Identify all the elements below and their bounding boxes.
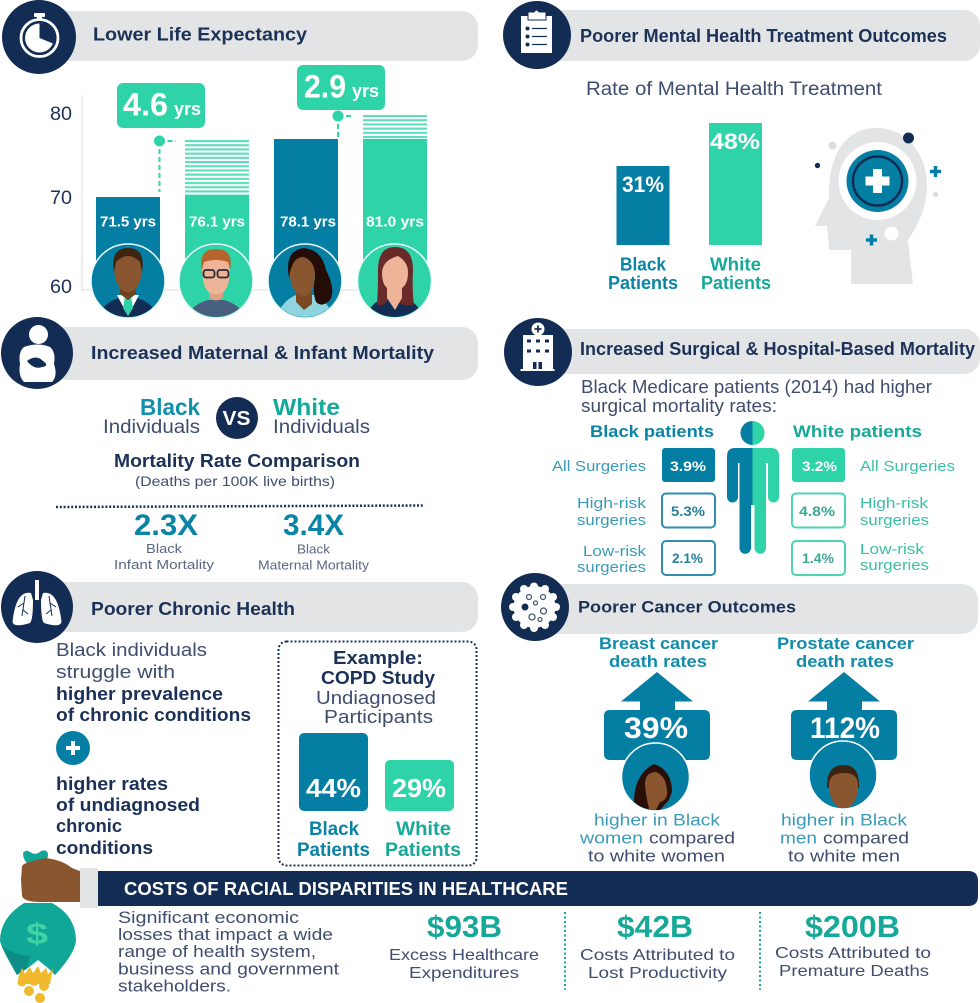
icon: white man portrait (179, 244, 253, 320)
text: economic losses: range of health system, (118, 943, 316, 961)
chart: life expectancy bars: 60 (50, 277, 72, 298)
icon: lungs (1, 571, 73, 643)
stat: maternal mortality: 3.4X (283, 509, 344, 542)
panel: chronic health (1, 571, 478, 866)
chart: treatment bars: Patients (608, 273, 678, 293)
chart: life expectancy bars: 71.5 yrs (100, 214, 156, 230)
icon: hospital (504, 318, 572, 386)
chart: life expectancy bars (50, 95, 430, 298)
icon: cancer cell (501, 573, 569, 641)
callout: COPD study example: Black (309, 819, 359, 840)
stat: prostate cancer (777, 635, 915, 866)
text: medicare patients (581, 377, 932, 416)
subheading: rate of treatment: Rate of Mental Health Treatment (586, 79, 883, 100)
text: economic losses: stakeholders. (118, 978, 231, 996)
text: undiagnosed: conditions (56, 838, 153, 858)
stat: prostate cancer: death rates (796, 653, 894, 671)
column: black patients: surgeries (577, 559, 646, 576)
stat: breast cancer: death rates (609, 653, 707, 671)
stat: $200B: Costs Attributed to (775, 945, 931, 962)
text: medicare patients: surgical mortality rates: (581, 396, 777, 416)
column: black patients: surgeries (577, 512, 646, 529)
comparison: black vs white: VS (222, 408, 250, 430)
column: white patients: High-risk (860, 495, 929, 512)
callout: COPD study example: Undiagnosed (316, 688, 436, 708)
panel: lower life expectancy (2, 0, 478, 320)
stat: $200B (775, 909, 931, 980)
header pill: mental health (540, 10, 980, 61)
chart: life expectancy bars: 81.0 yrs (366, 214, 424, 230)
text: higher prevalence (56, 640, 251, 725)
text: economic losses (118, 909, 339, 996)
column: white patients: 3.2% (802, 458, 838, 474)
column: black patients: 5.3% (671, 503, 706, 519)
icon: black man portrait (91, 244, 165, 320)
heading: maternal: Increased Maternal & Infant Mortality (91, 343, 434, 363)
stat: prostate cancer: to white men (788, 846, 900, 866)
text: higher prevalence: Black individuals (56, 640, 207, 660)
comparison: black vs white: Black (140, 394, 200, 420)
callout: COPD study example: White (396, 819, 451, 840)
stat: prostate cancer: 112% (810, 712, 880, 745)
stat: $93B (389, 909, 539, 982)
column: white patients: 1.4% (802, 550, 835, 566)
stat: breast cancer: compared (649, 828, 735, 848)
chart: treatment bars: 48% (710, 129, 760, 154)
stat: infant mortality (114, 509, 215, 572)
stat: prostate cancer: men (780, 828, 817, 848)
stat: breast cancer: to white women (588, 846, 725, 866)
stat: $93B: Excess Healthcare (389, 947, 539, 964)
stat: $200B: Premature Deaths (779, 963, 929, 980)
stat: $93B: $93B (427, 909, 502, 944)
banner: costs heading (98, 871, 978, 906)
icon: split person (727, 421, 779, 554)
stat: breast cancer: Breast cancer (599, 635, 719, 653)
column: black patients: 2.1% (672, 550, 704, 566)
heading: lower life expectancy: Lower Life Expectancy (93, 24, 307, 44)
column: black patients: Black patients (590, 422, 714, 441)
callout: 2.9 yrs gap: 2.9 (304, 68, 346, 104)
chart: life expectancy bars: 78.1 yrs (280, 214, 336, 230)
column: white patients (792, 422, 955, 575)
text: higher prevalence: higher prevalence (56, 684, 223, 704)
stat: prostate cancer: higher in Black (781, 810, 908, 830)
text: mortality rate comparison: Mortality Rate Comparison (114, 451, 360, 471)
column: white patients: 4.8% (799, 503, 836, 519)
chart: treatment bars: Black (620, 254, 667, 274)
callout: 2.9 yrs gap: yrs (352, 81, 379, 101)
icon: hand holding money bag (0, 850, 98, 1003)
stat: maternal mortality: Maternal Mortality (258, 558, 370, 572)
heading: surgical: Increased Surgical & Hospital-Based Mortality (580, 339, 975, 359)
chart: treatment bars: Patients (701, 273, 771, 293)
chart: treatment bars: 31% (622, 172, 664, 197)
callout: COPD study example: Example: (333, 648, 423, 668)
text: economic losses: business and government (118, 960, 339, 978)
stat: breast cancer (579, 635, 735, 866)
stat: maternal mortality (258, 509, 370, 572)
comparison: black vs white (103, 394, 370, 439)
header pill: life expectancy (50, 11, 478, 61)
banner: costs heading: COSTS OF RACIAL DISPARITIES IN HEALTHCARE (124, 878, 568, 899)
column: black patients (552, 422, 715, 576)
panel: maternal and infant mortality (1, 317, 478, 572)
icon: head with medical cross (815, 128, 941, 284)
heading: mental health: Poorer Mental Health Treatment Outcomes (580, 26, 947, 46)
callout: COPD study example: 29% (392, 773, 446, 803)
callout: COPD study example: Participants (324, 707, 433, 727)
column: white patients: surgeries (860, 557, 929, 574)
callout: 2.9 yrs gap (297, 65, 385, 138)
header pill: chronic (50, 582, 478, 632)
stat: $42B: Costs Attributed to (580, 947, 735, 964)
stat: infant mortality: Black (146, 541, 183, 556)
text: mortality rate comparison: (Deaths per 100K live births) (135, 473, 335, 489)
stat: maternal mortality: Black (297, 542, 331, 556)
callout: 4.6 yrs gap (117, 83, 205, 192)
header pill: surgical (540, 329, 980, 374)
stat: $93B: Expenditures (409, 965, 519, 982)
stat: prostate cancer: compared (823, 828, 909, 848)
text: higher prevalence: of chronic conditions (56, 705, 251, 725)
column: black patients: 3.9% (670, 458, 707, 474)
panel: costs of racial disparities (0, 850, 978, 1003)
chart: life expectancy bars: 76.1 yrs (189, 214, 245, 230)
panel: mental health treatment (503, 1, 980, 293)
icon: black woman portrait (268, 244, 342, 320)
callout: COPD study example: 44% (306, 773, 361, 803)
icon: stopwatch (2, 0, 76, 74)
stat: $42B (580, 909, 735, 982)
text: undiagnosed: chronic (56, 816, 122, 836)
header pill: maternal (50, 327, 478, 380)
stat: infant mortality: 2.3X (134, 509, 198, 542)
stat: prostate cancer: Prostate cancer (777, 635, 915, 653)
text: medicare patients: Black Medicare patients (2014) had higher (581, 377, 932, 397)
text: economic losses: losses that impact a wide (118, 926, 333, 944)
callout: COPD study example: Patients (297, 840, 370, 861)
column: black patients: All Surgeries (552, 458, 646, 475)
stat: breast cancer: higher in Black (594, 810, 721, 830)
panel: cancer outcomes (501, 573, 978, 866)
text: economic losses: Significant economic (118, 909, 299, 927)
column: white patients: surgeries (860, 512, 929, 529)
text: undiagnosed: higher rates (56, 774, 168, 794)
chart: treatment bars (608, 123, 771, 293)
chart: treatment bars: White (710, 254, 761, 274)
comparison: black vs white: Individuals (103, 417, 200, 438)
text: higher prevalence: struggle with (56, 662, 175, 682)
stat: $200B: $200B (805, 909, 900, 944)
callout: 4.6 yrs gap: yrs (174, 99, 201, 119)
icon: clipboard (503, 1, 571, 69)
icon: hand holding money bag: $ (26, 918, 48, 951)
stat: $42B: Lost Productivity (588, 965, 727, 982)
stat: $42B: $42B (617, 909, 693, 944)
comparison: black vs white: Individuals (273, 417, 370, 438)
column: white patients: Low-risk (860, 541, 925, 558)
comparison: black vs white: White (273, 394, 340, 420)
text: undiagnosed (56, 774, 200, 858)
callout: COPD study example: Patients (385, 840, 461, 861)
callout: 4.6 yrs gap: 4.6 (123, 86, 168, 122)
panel: surgical mortality (504, 318, 980, 576)
icon: plus (56, 731, 90, 765)
column: black patients: High-risk (577, 495, 647, 512)
text: undiagnosed: of undiagnosed (56, 795, 200, 815)
chart: life expectancy bars: 80 (50, 104, 72, 125)
column: white patients: White patients (793, 422, 922, 441)
callout: COPD study example: COPD Study (321, 668, 435, 688)
heading: chronic: Poorer Chronic Health (91, 599, 295, 619)
column: black patients: Low-risk (583, 543, 647, 560)
header pill: cancer (540, 584, 978, 634)
callout: COPD study example (278, 642, 476, 866)
icon: mother and infant (1, 317, 73, 389)
text: mortality rate comparison (114, 451, 360, 489)
column: white patients: All Surgeries (860, 458, 955, 475)
heading: cancer: Poorer Cancer Outcomes (578, 598, 796, 616)
icon: white woman portrait (358, 244, 432, 320)
stat: breast cancer: 39% (624, 712, 688, 745)
stat: breast cancer: women (579, 828, 643, 848)
chart: life expectancy bars: 70 (50, 188, 72, 209)
stat: infant mortality: Infant Mortality (114, 557, 215, 572)
